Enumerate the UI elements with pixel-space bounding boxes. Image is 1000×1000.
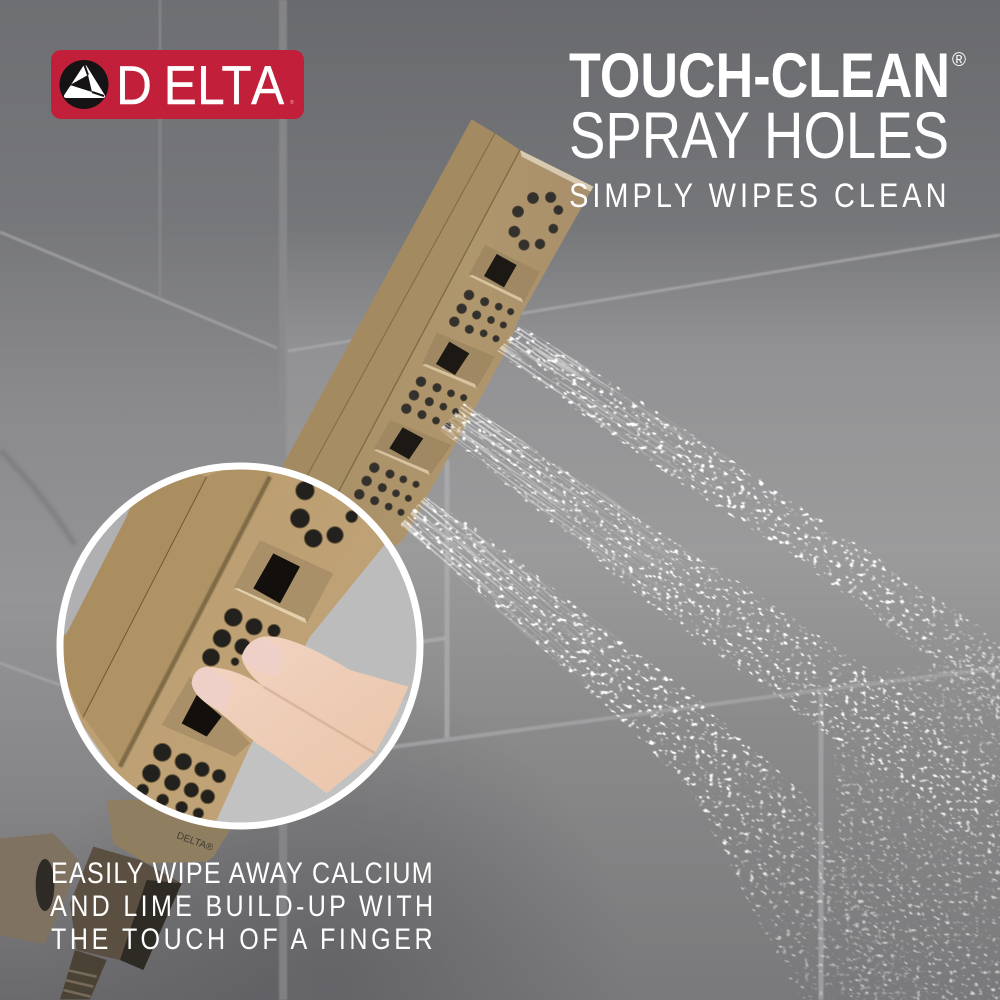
caption: EASILY WIPE AWAY CALCIUM	[51, 856, 433, 889]
registered mark: ®	[290, 99, 294, 106]
zoomed recesses and vents	[162, 540, 333, 757]
water spray: lower jet	[395, 481, 930, 1000]
water spray: middle jet	[427, 390, 1000, 860]
shower head main body	[283, 119, 593, 610]
headline block	[569, 41, 966, 215]
upper finger	[242, 636, 408, 753]
hose	[60, 950, 107, 999]
wall puck	[0, 833, 78, 944]
recess and vent: lower	[373, 420, 452, 475]
water spray: scattered droplets lower right	[830, 650, 1000, 1000]
Delta logo badge	[51, 50, 304, 119]
water spray: upper jet	[491, 320, 1000, 720]
caption: THE TOUCH OF A FINGER	[51, 922, 433, 955]
recess and vent: middle	[422, 333, 495, 388]
registered mark: ®	[952, 50, 966, 71]
recess and vent: top	[468, 245, 540, 303]
zoomed nozzles	[137, 481, 358, 819]
caption	[50, 856, 433, 955]
subheading: SIMPLY WIPES CLEAN	[569, 176, 946, 215]
wall mount and hose	[0, 800, 240, 999]
connector	[36, 859, 54, 911]
caption: AND LIME BUILD-UP WITH	[50, 889, 433, 922]
spray nozzles	[354, 192, 563, 516]
zoom circle: touch-clean detail	[50, 447, 430, 837]
wordmark: DELTA	[116, 56, 284, 117]
head neck	[107, 800, 240, 863]
holder bracket	[70, 847, 182, 970]
zoomed head body	[64, 470, 384, 821]
logo mark	[60, 60, 108, 109]
lower finger	[192, 667, 375, 793]
neck engraving: DELTA®	[175, 830, 215, 854]
